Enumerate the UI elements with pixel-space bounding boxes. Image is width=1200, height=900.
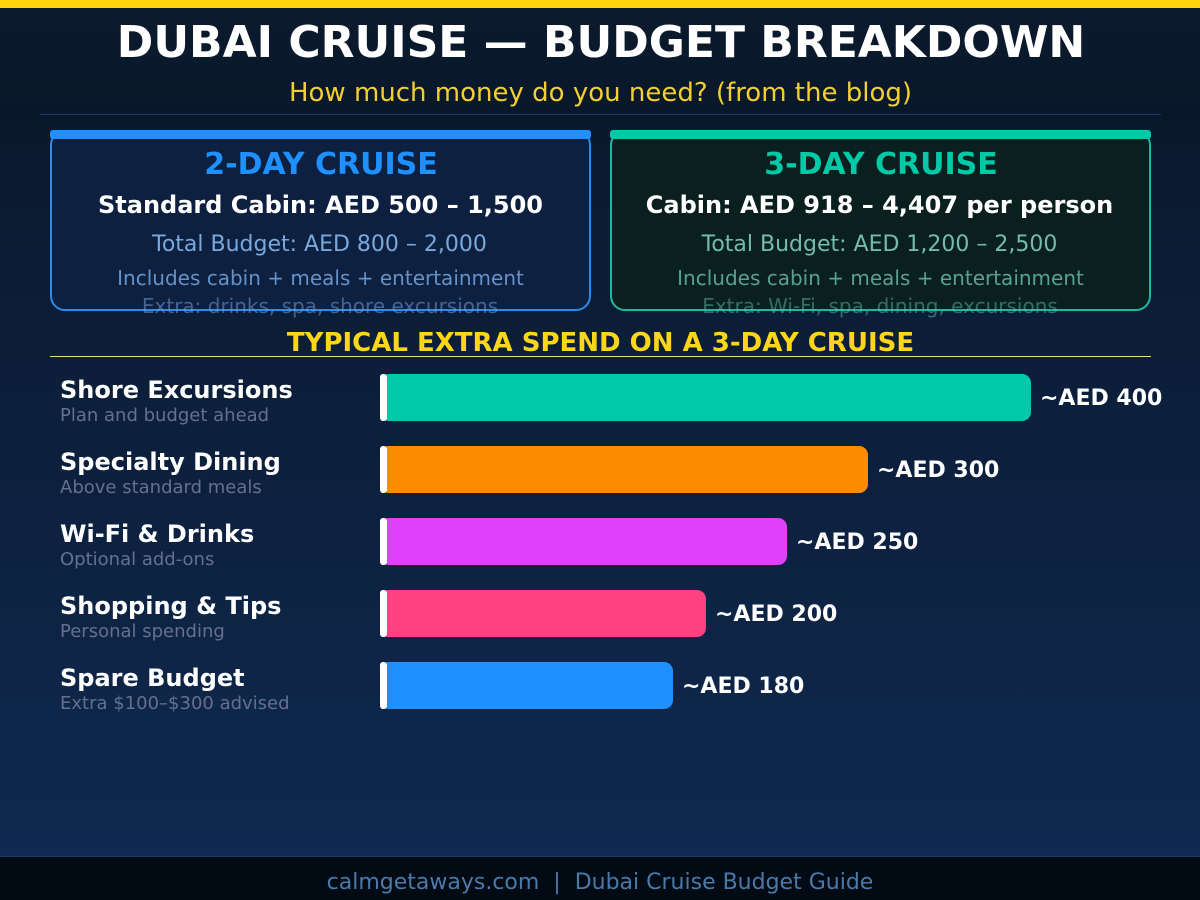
subtitle: How much money do you need? (from the blog) (289, 78, 912, 108)
includes note: Includes cabin + meals + entertainment (677, 266, 1084, 290)
row: shore excursions: ~AED 400 (1040, 386, 1162, 411)
extras note: Extra: Wi-Fi, spa, dining, excursions (702, 294, 1058, 318)
cabin price: Standard Cabin: AED 500 – 1,500 (98, 191, 543, 219)
row: specialty dining (60, 446, 999, 498)
row: wi-fi and drinks: Optional add-ons (60, 549, 214, 570)
row: shopping and tips (60, 590, 837, 642)
extras note: Extra: drinks, spa, shore excursions (142, 294, 498, 318)
row: shore excursions: Shore Excursions (60, 376, 293, 404)
total budget: Total Budget: AED 800 – 2,000 (151, 232, 487, 257)
row: wi-fi and drinks: Wi-Fi & Drinks (60, 520, 254, 548)
row: specialty dining: ~AED 300 (877, 458, 999, 483)
row: shore excursions: Plan and budget ahead (60, 405, 269, 426)
row: spare budget: Spare Budget (60, 664, 245, 692)
heading: 3-day cruise: 3-DAY CRUISE (764, 147, 998, 182)
row: shopping and tips: Personal spending (60, 621, 225, 642)
row: shopping and tips: ~AED 200 (715, 602, 837, 627)
row: shore excursions (60, 374, 1162, 426)
panel: 2-day cruise (50, 130, 591, 318)
title: DUBAI CRUISE — BUDGET BREAKDOWN (117, 17, 1085, 68)
footer text: calmgetaways.com | Dubai Cruise Budget Guide (327, 870, 873, 895)
row: specialty dining: Specialty Dining (60, 448, 281, 476)
section heading: TYPICAL EXTRA SPEND ON A 3-DAY CRUISE (287, 328, 914, 358)
row: wi-fi and drinks (60, 518, 918, 570)
cabin price: Cabin: AED 918 – 4,407 per person (646, 191, 1113, 219)
row: spare budget (60, 662, 804, 714)
header band (0, 8, 1200, 121)
top accent bar (0, 0, 1200, 8)
total budget: Total Budget: AED 1,200 – 2,500 (701, 232, 1057, 257)
row: wi-fi and drinks: ~AED 250 (796, 530, 918, 555)
row: spare budget: Extra $100–$300 advised (60, 693, 290, 714)
row: shopping and tips: Shopping & Tips (60, 592, 281, 620)
includes note: Includes cabin + meals + entertainment (117, 266, 524, 290)
heading: 2-day cruise: 2-DAY CRUISE (204, 147, 438, 182)
panel: 3-day cruise (610, 130, 1151, 318)
row: spare budget: ~AED 180 (682, 674, 804, 699)
footer (0, 856, 1200, 900)
row: specialty dining: Above standard meals (60, 477, 262, 498)
bar chart (60, 374, 1162, 714)
